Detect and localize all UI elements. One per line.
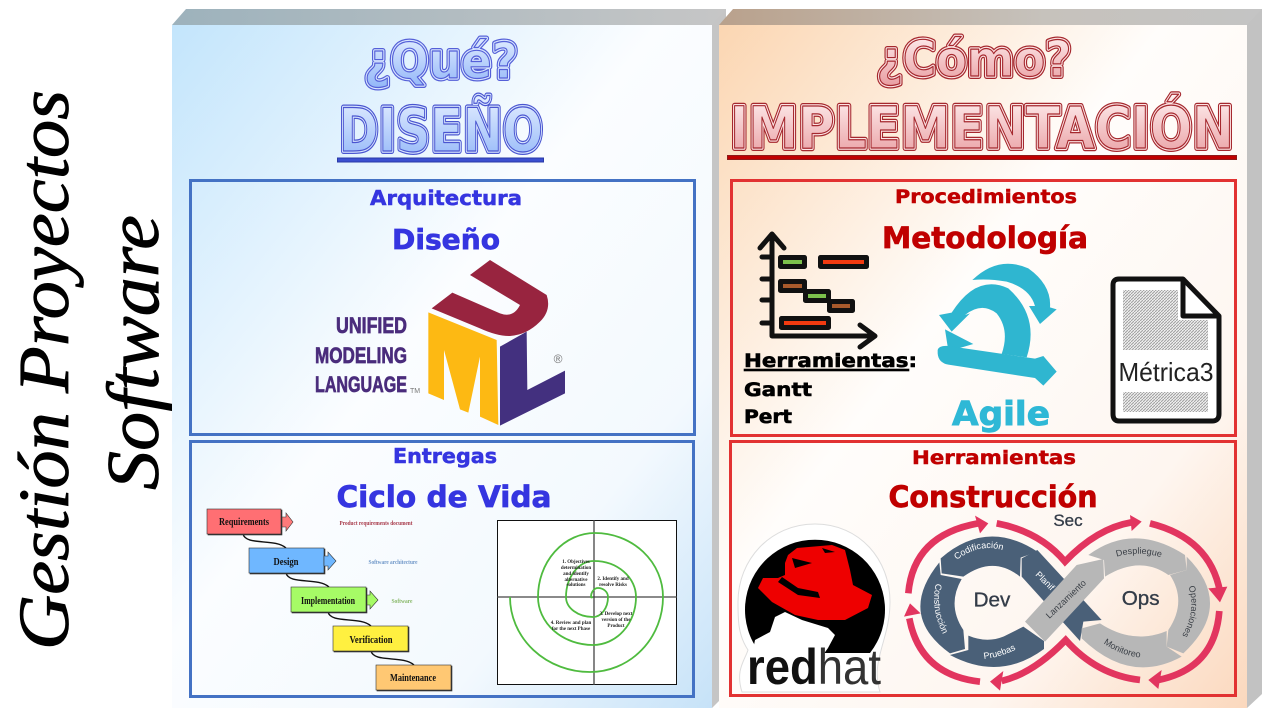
chart: spiral model: determination bbox=[561, 566, 591, 571]
vertical title: Software bbox=[93, 215, 175, 490]
panel: cómo / implementación background bbox=[719, 9, 1262, 708]
chart: spiral model: solutions bbox=[567, 583, 585, 588]
heading: ¿Cómo? IMPLEMENTACIÓN: ¿Cómo? bbox=[876, 31, 1072, 88]
icon: red hat logo bbox=[738, 524, 890, 695]
chart: waterfall lifecycle: Product requirements document bbox=[340, 521, 412, 527]
chart: spiral model: version of the bbox=[602, 618, 631, 623]
heading: procedimientos: Procedimientos bbox=[895, 186, 1077, 208]
chart: spiral model bbox=[497, 520, 677, 685]
ring labels: Despliegue bbox=[1116, 547, 1162, 557]
outer red arrows bbox=[904, 515, 1227, 691]
ring labels: Planif bbox=[1036, 571, 1056, 590]
heading: ¿Qué? DISEÑO: ¿Qué? bbox=[364, 33, 518, 90]
heading: ¿Cómo? IMPLEMENTACIÓN: ¿Cómo? bbox=[876, 31, 1072, 88]
heading: ¿Qué? DISEÑO: ¿Qué? bbox=[364, 33, 518, 90]
chart: waterfall lifecycle bbox=[207, 509, 451, 690]
heading: arquitectura: Arquitectura bbox=[370, 186, 522, 210]
label: agile: Agile bbox=[952, 394, 1050, 433]
icon: UML logo: LANGUAGE bbox=[315, 372, 407, 397]
chart: spiral model: 1. Objectives bbox=[562, 560, 590, 565]
chart: gantt icon bbox=[760, 234, 875, 347]
icon: UML logo: ® bbox=[554, 352, 563, 366]
chart: waterfall lifecycle: Design bbox=[274, 557, 299, 568]
vertical title: Gestión Proyectos bbox=[4, 90, 84, 650]
ring labels: Pruebas bbox=[984, 646, 1016, 659]
icon: UML logo bbox=[315, 260, 565, 426]
chart: spiral model: 4. Review and plan bbox=[551, 621, 591, 626]
heading: construcción: Construcción bbox=[888, 480, 1098, 514]
heading: herramientas: Herramientas bbox=[912, 447, 1076, 469]
icon: agile loop bbox=[938, 264, 1057, 386]
diagram: devsecops infinity loop bbox=[904, 515, 1228, 690]
icon: UML logo: TM bbox=[410, 388, 420, 395]
chart: spiral model: 3. Develop next bbox=[600, 612, 633, 617]
ring labels: Lanzamiento bbox=[1046, 581, 1086, 618]
chart: spiral model: 2. Identify and bbox=[597, 577, 629, 582]
ops ring bbox=[1025, 538, 1210, 667]
chart: spiral model: for the next Phase bbox=[552, 627, 591, 632]
heading: ¿Qué? DISEÑO: DISEÑO bbox=[339, 94, 543, 166]
panel: entregas bbox=[190, 442, 694, 696]
chart: spiral model: and identify bbox=[563, 572, 589, 577]
text: herramientas gantt pert bbox=[744, 350, 917, 428]
heading: entregas: Entregas bbox=[393, 444, 497, 468]
heading: diseño: Diseño bbox=[392, 223, 500, 256]
label: sec: Sec bbox=[1053, 511, 1083, 530]
panel: arquitectura bbox=[190, 180, 694, 434]
panel: procedimientos bbox=[732, 180, 1236, 436]
heading: ¿Cómo? IMPLEMENTACIÓN bbox=[728, 31, 1236, 162]
chart: waterfall lifecycle: Requirements bbox=[219, 517, 269, 528]
heading: ciclo de vida: Ciclo de Vida bbox=[336, 480, 552, 514]
icon: UML logo: UNIFIED bbox=[336, 313, 407, 338]
heading: ¿Qué? DISEÑO: DISEÑO bbox=[339, 94, 543, 166]
text: herramientas gantt pert: Herramientas: bbox=[744, 350, 917, 372]
ring labels bbox=[934, 542, 1196, 659]
heading: ¿Cómo? IMPLEMENTACIÓN: ¿Cómo? bbox=[876, 31, 1072, 88]
text: herramientas gantt pert: Gantt bbox=[744, 379, 812, 401]
ring labels: Codificación bbox=[954, 542, 1003, 559]
diagram: devsecops infinity loop: Dev bbox=[974, 589, 1011, 612]
chart: spiral model: resolve Risks bbox=[599, 583, 627, 588]
diagram: devsecops infinity loop: Ops bbox=[1122, 587, 1160, 610]
heading: metodología: Metodología bbox=[882, 221, 1088, 255]
ring labels: Monitoreo bbox=[1104, 638, 1140, 658]
chart: waterfall lifecycle: Verification bbox=[350, 635, 393, 646]
chart: waterfall lifecycle: Software architecture bbox=[368, 560, 418, 566]
icon: red hat logo: redhat bbox=[747, 639, 881, 695]
icon: métrica3 document bbox=[1113, 279, 1219, 421]
icon: métrica3 document: Métrica3 bbox=[1118, 357, 1214, 387]
text: herramientas gantt pert: Pert bbox=[744, 406, 792, 428]
chart: waterfall lifecycle: Maintenance bbox=[390, 673, 436, 684]
ring labels: Construcción bbox=[934, 584, 947, 634]
panel: qué / diseño background bbox=[172, 9, 726, 708]
heading: ¿Qué? DISEÑO: DISEÑO bbox=[339, 94, 543, 166]
panel: herramientas bbox=[729, 440, 1237, 697]
chart: spiral model: alternative bbox=[564, 578, 588, 583]
chart: spiral model: Product bbox=[607, 624, 625, 629]
dev ring bbox=[920, 537, 1102, 667]
chart: waterfall lifecycle: Software bbox=[392, 599, 413, 605]
vertical title bbox=[4, 90, 175, 650]
heading: ¿Qué? DISEÑO: ¿Qué? bbox=[364, 33, 518, 90]
icon: UML logo: MODELING bbox=[315, 343, 407, 368]
heading: ¿Qué? DISEÑO bbox=[338, 33, 544, 166]
ring labels: Operaciones bbox=[1182, 586, 1196, 637]
chart: waterfall lifecycle: Implementation bbox=[301, 596, 355, 607]
